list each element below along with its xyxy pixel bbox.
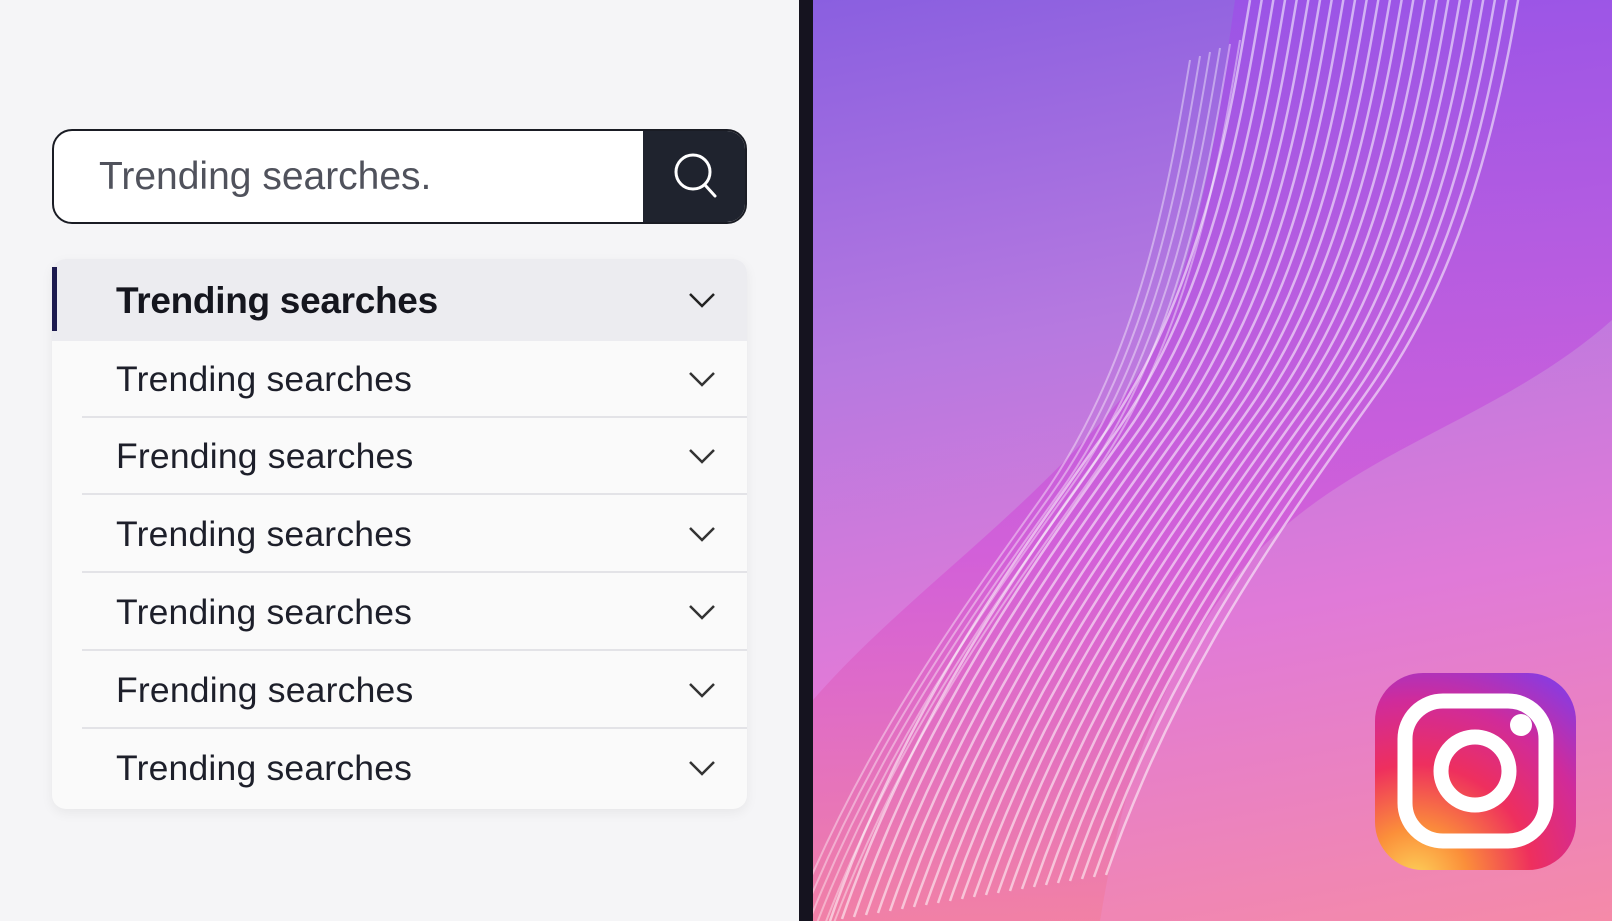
row 3: Trending searches (116, 514, 412, 554)
row 4 (82, 592, 747, 651)
row 4: Trending searches (116, 592, 412, 632)
row 2 (82, 436, 747, 495)
icon: instagram logo (1375, 673, 1576, 870)
vertical divider (799, 0, 813, 921)
header row (52, 259, 747, 341)
row 5: Frending searches (116, 670, 413, 710)
right decorative wave panel (813, 0, 1612, 921)
row 2: Frending searches (116, 436, 413, 476)
search button (643, 131, 747, 222)
row 1: Trending searches (116, 359, 412, 399)
search placeholder text: Trending searches. (99, 155, 431, 198)
row 3 (82, 514, 747, 573)
row 6 (116, 748, 715, 788)
row 6: Trending searches (116, 748, 412, 788)
dropdown list panel (52, 259, 747, 809)
header row: Trending searches (116, 280, 438, 321)
row 5 (82, 670, 747, 729)
row 1 (82, 359, 747, 418)
search bar (52, 129, 747, 224)
